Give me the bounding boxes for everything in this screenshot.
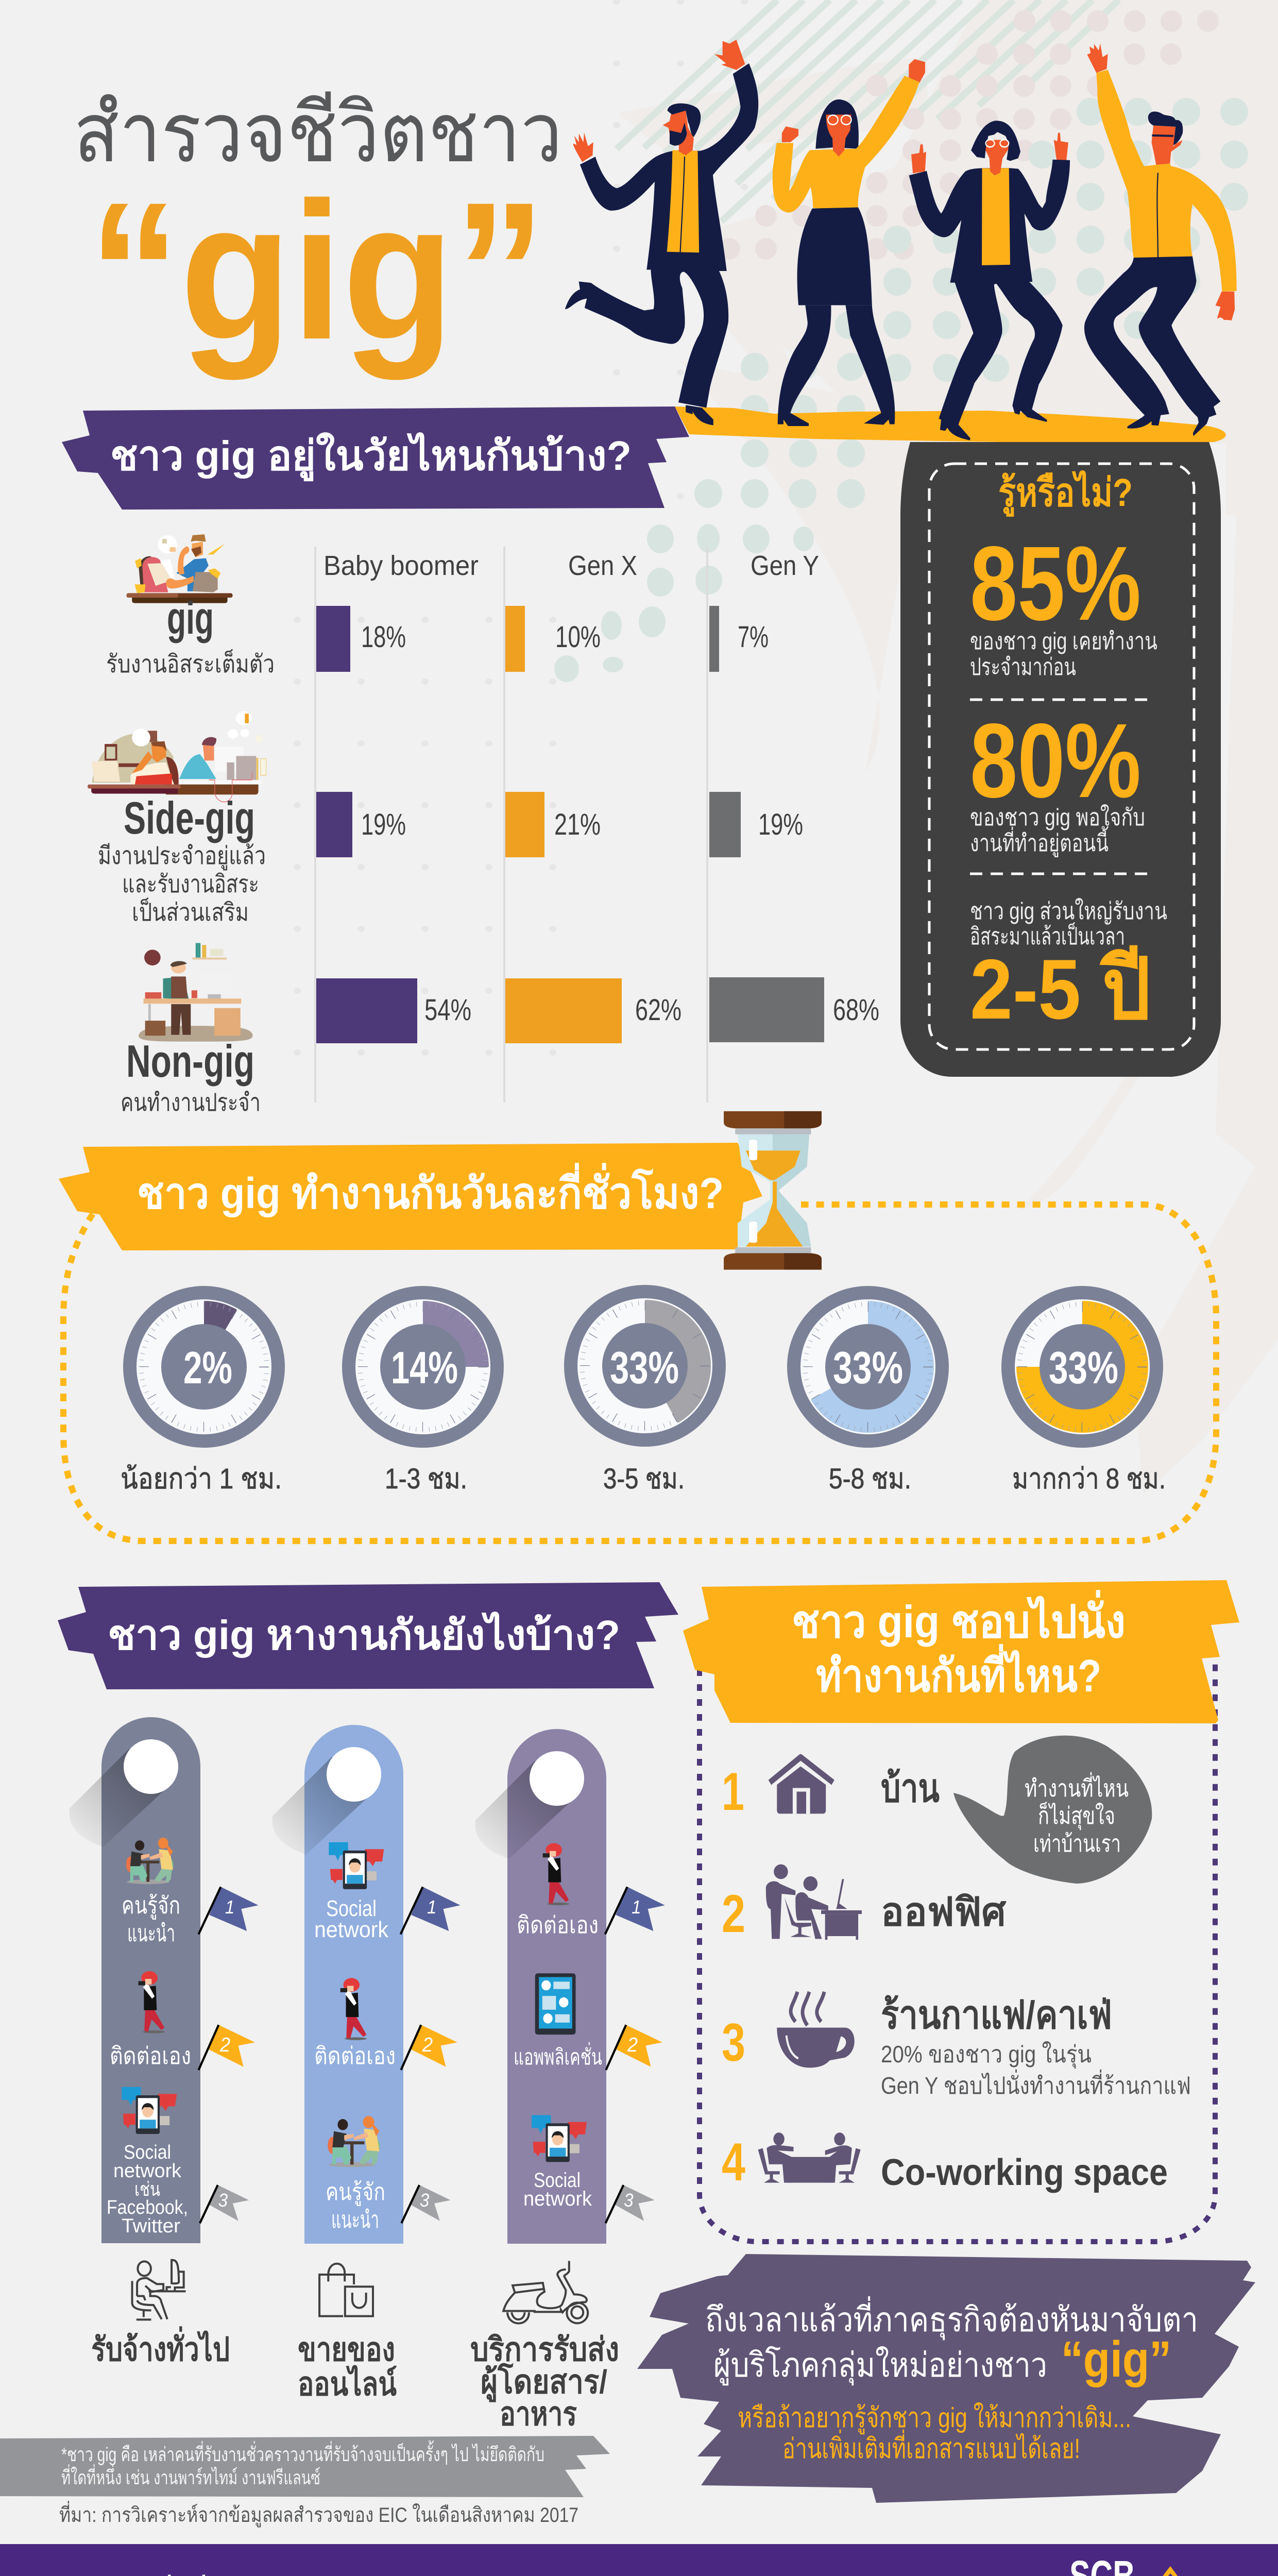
text: callout line 1: ถึงเวลาแล้วที่ภาคธุรกิจต้องหันมาจับตา: [705, 2296, 1198, 2341]
flag 2 column 1: 2: [219, 2034, 230, 2056]
text: non-gig description: คนทำงานประจำ: [121, 1089, 261, 1116]
text: callout line 3: หรือถ้าอยากรู้จักชาว gig ให้มากกว่าเดิม...: [738, 2402, 1131, 2434]
text: social network: [107, 2142, 188, 2237]
text: cafe detail: Gen Y ชอบไปนั่งทำงานที่ร้านกาแฟ: [881, 2069, 1191, 2099]
heading text: workplace: ชาว gig ชอบไปนั่ง: [792, 1590, 1126, 1647]
text: referral: [122, 1892, 180, 1946]
flag 3 column 2: 3: [420, 2191, 429, 2211]
text: cafe detail: 20% ของชาว gig ในรุ่น: [881, 2041, 1092, 2069]
flag 1 column 3: 1: [632, 1897, 641, 1918]
bar chart: value labels: 19%: [361, 808, 406, 841]
flag 3 column 1: [200, 2185, 249, 2223]
icon: social phone: [122, 2087, 177, 2134]
icon: shopping bag: [319, 2264, 373, 2316]
icon: scooter: [503, 2261, 588, 2324]
gauge: more than 8 hours: [1001, 1286, 1163, 1448]
dancing people illustration: [565, 40, 1237, 443]
panel: online seller ranking pillar: [272, 1725, 403, 2244]
dashed frame: hours panel: [63, 1205, 1216, 1541]
text: online selling label: ออนไลน์: [298, 2365, 397, 2402]
text: delivery label: [470, 2331, 619, 2432]
heading banner: finding jobs: [58, 1582, 678, 1689]
bar chart: value labels: 54%: [424, 993, 471, 1027]
closing callout: [637, 2254, 1255, 2503]
text: co-working space: Co-working space: [881, 2152, 1168, 2193]
text: bubble quote: ก็ไม่สุขใจ: [1038, 1802, 1115, 1831]
text: direct contact: ติดต่อเอง: [110, 2042, 191, 2069]
text: social network: network: [523, 2188, 592, 2210]
gauge: 3-5 hours: 33%: [610, 1342, 679, 1393]
text: social network: [523, 2169, 592, 2210]
flag 2 column 3: 2: [627, 2034, 638, 2056]
text: general hire label: รับจ้างทั่วไป: [91, 2326, 230, 2368]
gauge labels: 3-5 ชม.: [603, 1462, 685, 1495]
bar chart: value labels: 18%: [361, 620, 406, 654]
bar chart: generation headers: [323, 550, 819, 581]
text: bubble quote: เท่าบ้านเรา: [1033, 1830, 1121, 1857]
gauge: more than 8 hours: 33%: [1049, 1342, 1118, 1393]
ranking numbers: 1: [722, 1762, 744, 1822]
icon: friends: [328, 2116, 380, 2167]
text: delivery label: ผู้โดยสาร/: [481, 2362, 607, 2402]
ranking flags: [198, 1887, 665, 2223]
text: referral: แนะนำ: [331, 2206, 379, 2233]
flag 3 column 3: [606, 2185, 655, 2223]
text: duration caption: ชาว gig ส่วนใหญ่รับงาน: [970, 897, 1167, 924]
stat: 85%: 85%: [970, 524, 1141, 642]
dotted frame: workplace panel: [700, 1654, 1215, 2242]
icon: hourglass: [724, 1111, 822, 1270]
flag 3 column 3: 3: [624, 2191, 634, 2211]
panel background: [900, 442, 1221, 1077]
text: gig label: gig: [167, 592, 214, 643]
icon: office: [766, 1865, 862, 1940]
bar chart: generation headers: Gen X: [568, 550, 637, 581]
text: duration caption: อิสระมาแล้วเป็นเวลา: [970, 922, 1125, 950]
ranking numbers: 2: [722, 1884, 745, 1944]
text: referral: แนะนำ: [127, 1920, 175, 1946]
bar chart: value labels: 21%: [554, 808, 601, 841]
dashed frame: [929, 464, 1194, 1049]
text: social network: [314, 1896, 389, 1942]
bar chart: value labels: 19%: [758, 808, 803, 841]
text: social network: network: [314, 1917, 389, 1942]
icon: house: [770, 1757, 833, 1814]
panel: did you know: [900, 442, 1221, 1077]
flag 3 column 1: 3: [218, 2191, 228, 2211]
bar chart: value labels: [361, 620, 879, 1027]
heading text: workplace: [792, 1590, 1126, 1701]
text: online selling label: [298, 2331, 397, 2402]
text: cafe: ร้านกาแฟ/คาเฟ่: [881, 1993, 1112, 2037]
flag 1 column 1: 1: [225, 1897, 234, 1918]
gauge: less than 1 hour: [123, 1286, 285, 1448]
footer: [0, 2544, 1278, 2576]
icon: gig worker at desk: [127, 534, 233, 603]
stat: 2-5 years: 2-5 ปี: [970, 942, 1151, 1037]
bar chart: value labels: 68%: [833, 993, 879, 1027]
text: side-gig description: และรับงานอิสระ: [122, 871, 259, 898]
flag 3 column 2: [401, 2185, 451, 2223]
gauge labels: น้อยกว่า 1 ชม.: [121, 1462, 282, 1495]
text: online selling label: ขายของ: [298, 2331, 395, 2368]
panel: delivery ranking pillar: [475, 1729, 606, 2244]
panel: general hire ranking pillar: [69, 1717, 200, 2243]
gauge labels: [121, 1462, 1166, 1495]
text: side-gig description: [98, 842, 266, 926]
text: gig definition: ที่ใดที่หนึ่ง เช่น งานพาร์ทไทม์ งานฟรีแลนซ์: [61, 2464, 320, 2489]
gauge labels: มากกว่า 8 ชม.: [1012, 1462, 1166, 1495]
bar chart: value labels: 7%: [738, 620, 769, 654]
text: side-gig label: Side-gig: [124, 792, 255, 843]
heading text: age groups: ชาว gig อยู่ในวัยไหนกันบ้าง?: [110, 432, 632, 482]
heading banner: age groups: [62, 406, 689, 510]
text: callout gig: “gig”: [1061, 2331, 1171, 2387]
heading text: finding jobs: ชาว gig หางานกันยังไงบ้าง?: [108, 1611, 620, 1658]
text: delivery label: อาหาร: [500, 2395, 577, 2432]
title: gig: “gig”: [89, 161, 546, 381]
note banner: [0, 2436, 610, 2497]
text: referral: [326, 2178, 385, 2233]
gauge: less than 1 hour: 2%: [183, 1342, 232, 1393]
text: social network: Social: [534, 2169, 581, 2192]
gauge labels: 5-8 ชม.: [829, 1462, 911, 1495]
text: referral: คนรู้จัก: [122, 1892, 180, 1920]
icon: side-gig workers: [88, 711, 266, 802]
stat: 80%: 80%: [970, 702, 1141, 820]
flag 1 column 3: [605, 1887, 665, 1934]
text: bubble quote: ทำงานที่ไหน: [1025, 1772, 1129, 1802]
text: callout line 2: ผู้บริโภคกลุ่มใหม่อย่างชาว: [713, 2346, 1047, 2386]
text: social network: Social: [124, 2142, 171, 2163]
ranking numbers: 3: [722, 2013, 745, 2073]
text: non-gig label: Non-gig: [126, 1036, 254, 1087]
flag 2 column 1: [198, 2025, 255, 2070]
heading text: workplace: ทำงานกันที่ไหน?: [816, 1644, 1101, 1701]
text: direct contact: ติดต่อเอง: [314, 2042, 396, 2069]
flag 2 column 3: [606, 2025, 662, 2070]
flag 1 column 2: [401, 1887, 461, 1934]
background pattern: [268, 0, 1278, 1494]
text: social network: Facebook,: [107, 2197, 188, 2218]
heading banner: hours: [59, 1143, 762, 1250]
text: direct contact: ติดต่อเอง: [517, 1911, 599, 1938]
icon: SCB logo: [1147, 2566, 1194, 2576]
text: home: บ้าน: [881, 1767, 940, 1810]
heading banner: workplace: [683, 1580, 1239, 1723]
figure: woman with skirt: [773, 59, 925, 426]
flag 2 column 2: 2: [422, 2034, 433, 2056]
gauge: 3-5 hours: [564, 1285, 726, 1447]
icon: walking person: [543, 1843, 569, 1905]
yellow platform: [675, 406, 1226, 443]
text: side-gig description: มีงานประจำอยู่แล้ว: [98, 842, 266, 871]
flag 2 column 2: [401, 2025, 457, 2070]
icon: app tablet: [535, 1973, 575, 2035]
heading text: hours: ชาว gig ทำงานกันวันละกี่ชั่วโมง?: [137, 1163, 724, 1217]
bar chart: generation headers: Baby boomer: [323, 550, 479, 581]
flag 1 column 1: [198, 1887, 259, 1934]
gauge: 5-8 hours: 33%: [833, 1342, 903, 1393]
icon: general hire: [132, 2260, 185, 2319]
gauge: 5-8 hours: [787, 1286, 949, 1448]
text: callout line 4: อ่านเพิ่มเติมที่เอกสารแนบได้เลย!: [782, 2429, 1080, 2464]
heading: did you know: รู้หรือไม่?: [998, 470, 1133, 517]
text: stat 85 caption: ประจำมาก่อน: [970, 653, 1076, 680]
divider: [970, 700, 1154, 874]
text: side-gig description: เป็นส่วนเสริม: [132, 897, 249, 926]
text: stat 80 caption: ของชาว gig พอใจกับ: [970, 804, 1145, 831]
text: stat 80 caption: งานที่ทำอยู่ตอนนี้: [970, 826, 1109, 857]
text: delivery label: บริการรับส่ง: [470, 2331, 619, 2368]
text: gig definition: *ชาว gig คือ เหล่าคนที่รับงานชั่วคราวงานที่รับจ้างจบเป็นครั้งๆ ไป ไม่ยึดติดกับ: [61, 2440, 544, 2466]
bar chart grid lines: [315, 547, 707, 1103]
speech bubble: [953, 1736, 1152, 1884]
icon: coffee cup: [777, 1992, 855, 2067]
text: social network: Social: [326, 1896, 377, 1921]
text: bubble quote: [1025, 1772, 1129, 1857]
bar chart: value labels: 10%: [555, 620, 601, 654]
text: social network: Twitter: [122, 2215, 180, 2237]
bar chart: generation headers: Gen Y: [751, 550, 819, 581]
icon: walking person: [340, 1978, 367, 2040]
icon: social phone: [532, 2115, 587, 2162]
text: stat 85 caption: ของชาว gig เคยทำงาน: [970, 628, 1157, 654]
icon: office worker at desk: [139, 943, 253, 1042]
icon: co-working: [758, 2132, 861, 2183]
text: application: แอพพลิเคชั่น: [514, 2042, 602, 2069]
gauge: 1-3 hours: 14%: [391, 1342, 458, 1393]
text: gig description: รับงานอิสระเต็มตัว: [106, 649, 275, 678]
text: referral: คนรู้จัก: [326, 2178, 385, 2206]
gauge labels: 1-3 ชม.: [385, 1462, 467, 1495]
icon: walking person: [139, 1971, 165, 2033]
figure: woman with bob hair: [909, 121, 1070, 440]
text: social network: network: [113, 2160, 182, 2182]
text: social network: เช่น: [134, 2179, 160, 2200]
title: Thai line: สำรวจชีวิตชาว: [74, 87, 563, 179]
text: office: ออฟฟิศ: [881, 1890, 1007, 1934]
bar chart: bars: [316, 606, 824, 1043]
flag 1 column 2: 1: [427, 1897, 436, 1918]
figure: man jumping: [565, 40, 758, 426]
icon: social phone: [329, 1842, 384, 1889]
bar chart: value labels: 62%: [635, 993, 681, 1027]
icon: friends: [126, 1838, 174, 1884]
ranking numbers: 4: [722, 2132, 745, 2192]
text: source: ที่มา: การวิเคราะห์จากข้อมูลผลสำรวจของ EIC ในเดือนสิงหาคม 2017: [59, 2501, 578, 2527]
gauge: 1-3 hours: [342, 1286, 504, 1448]
figure: man with arm raised: [1084, 43, 1237, 436]
ranking numbers: [722, 1762, 745, 2192]
